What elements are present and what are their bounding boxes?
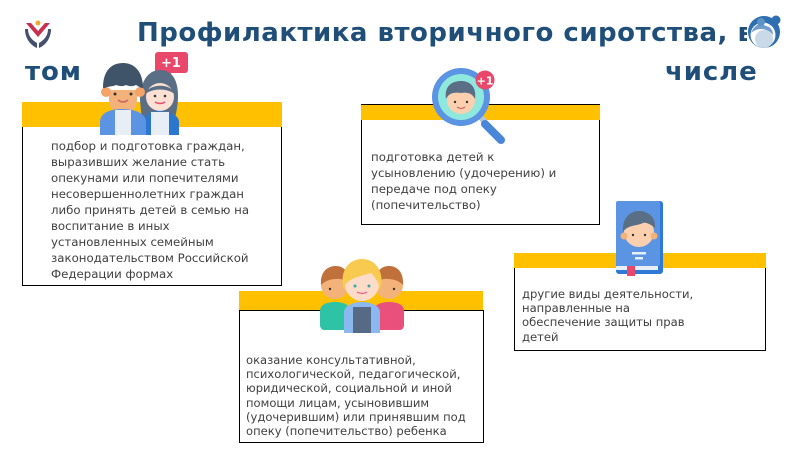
panel: selection: установленных семейным: [51, 235, 214, 249]
title line 1: Профилактика вторичного сиротства, в: [137, 18, 754, 48]
panel: assistance: юридической, социальной и иной: [246, 381, 452, 395]
title line 2 right: числе: [665, 57, 758, 87]
panel: assistance: опеку (попечительство) ребенка: [246, 424, 447, 438]
panel: preparing children: передаче под опеку: [371, 182, 497, 196]
icon: group of three: [320, 259, 404, 333]
panel: other activities: детей: [522, 330, 559, 344]
panel: preparing children: [361, 104, 600, 225]
panel: other activities: [514, 253, 766, 351]
panel: selection: либо принять детей в семью на: [51, 203, 249, 217]
panel: selection: подбор и подготовка граждан,: [51, 139, 245, 153]
icon: couple with +1: [100, 52, 188, 135]
panel: preparing children: подготовка детей к: [371, 150, 494, 164]
panel: selection: несовершеннолетних граждан: [51, 187, 244, 201]
logo right: [747, 16, 780, 48]
panel: selection: воспитание в иных: [51, 219, 170, 233]
panel: assistance: помощи лицам, усыновившим: [246, 396, 429, 410]
panel: other activities: направленные на: [522, 301, 630, 315]
logo left: [25, 20, 51, 48]
panel: preparing children: усыновлению (удочерению) и: [371, 166, 556, 180]
panel: selection: законодательством Российской: [51, 251, 249, 265]
icon: magnifier: +1: [477, 74, 493, 88]
panel: other activities: другие виды деятельности,: [522, 287, 693, 301]
panel: other activities: обеспечение защиты прав: [522, 315, 685, 329]
panel: assistance: (удочерившим) или принявшим под: [246, 410, 466, 424]
panel: assistance: психологической, педагогической,: [246, 367, 460, 381]
icon: book: [616, 201, 663, 276]
icon: couple with +1: +1: [161, 56, 181, 71]
panel: assistance: [239, 291, 484, 443]
panel: assistance: оказание консультативной,: [246, 353, 416, 367]
panel: selection: опекунами или попечителями: [51, 171, 239, 185]
panel: selection: выразивших желание стать: [51, 155, 225, 169]
title line 2 left: том: [25, 57, 82, 87]
panel: preparing children: (попечительство): [371, 198, 481, 212]
icon: magnifier: [432, 68, 505, 144]
panel: selection: Федерации формах: [51, 267, 173, 281]
